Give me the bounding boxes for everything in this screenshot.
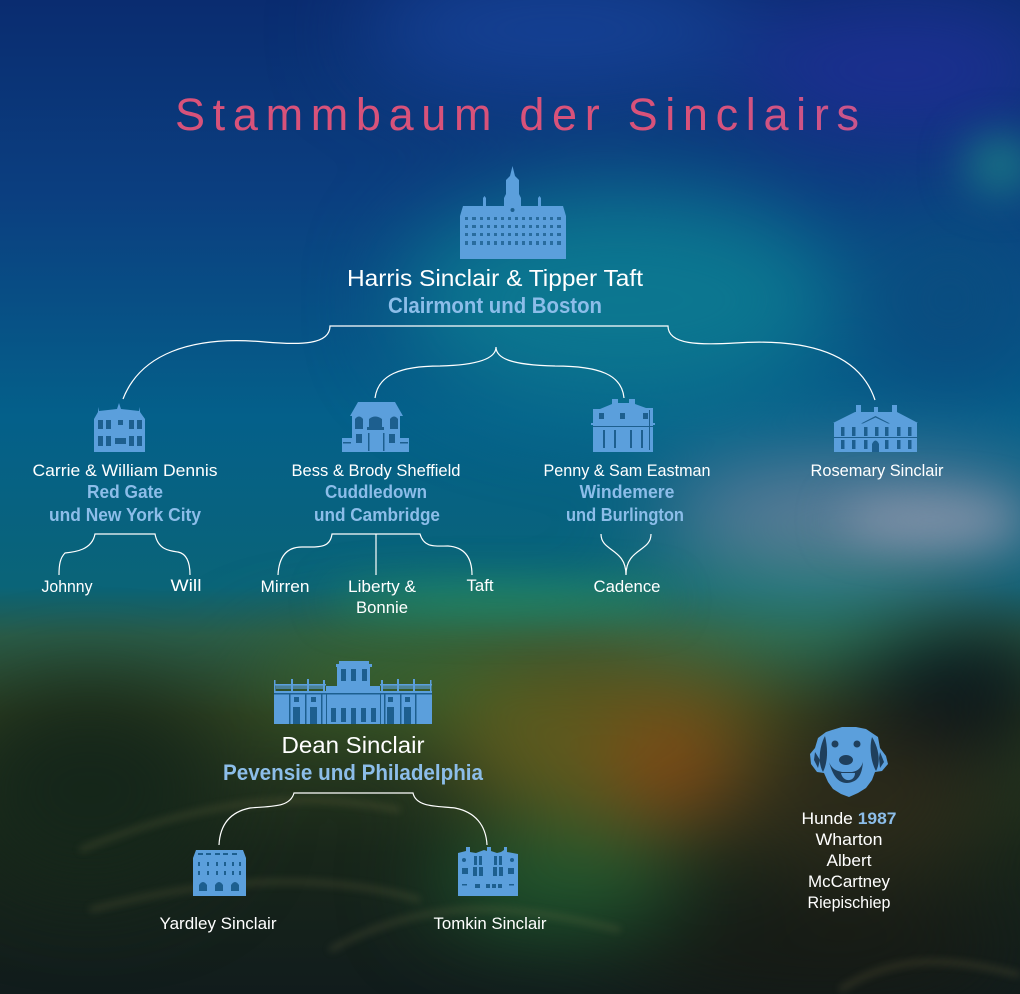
dog names: McCartney — [808, 872, 890, 891]
places: Windemere — [580, 482, 674, 502]
icon: Pevensie building — [274, 661, 432, 724]
child: Liberty and Bonnie: Bonnie — [356, 598, 408, 617]
icon: Rosemary house — [833, 405, 918, 452]
child: Cadence: Cadence — [594, 577, 660, 596]
child: Tomkin Sinclair — [434, 847, 547, 933]
places: Red Gate — [87, 482, 163, 502]
places: Pevensie und Philadelphia — [223, 760, 484, 785]
panel: Carrie and William Dennis: und New York City — [49, 505, 201, 525]
dog names: Wharton — [816, 830, 882, 849]
panel: Penny and Sam Eastman: und Burlington — [566, 505, 684, 525]
child: Taft: Taft — [466, 576, 494, 595]
icon: Yardley house — [193, 850, 246, 896]
connector: first generation — [123, 326, 875, 400]
icon: Windemere house — [591, 399, 655, 452]
connector: children — [219, 793, 487, 845]
panel: Bess and Brody Sheffield: und Cambridge — [314, 505, 440, 525]
panel: Rosemary Sinclair — [810, 405, 944, 480]
child: Yardley Sinclair — [160, 850, 277, 933]
name: Carrie & William Dennis — [32, 461, 218, 480]
dog names — [808, 830, 890, 912]
connector: children — [59, 534, 190, 575]
places: Clairmont und Boston — [388, 293, 602, 318]
connector: children — [278, 534, 472, 575]
child: Mirren: Mirren — [260, 577, 310, 596]
child: Liberty and Bonnie — [348, 577, 417, 617]
child: Liberty and Bonnie: Liberty & — [348, 577, 417, 596]
title: Stammbaum der Sinclairs — [175, 89, 859, 140]
connector: child — [601, 534, 651, 575]
name: Bess & Brody Sheffield — [292, 461, 460, 480]
places: Cuddledown — [325, 482, 427, 502]
name: Harris Sinclair & Tipper Taft — [347, 265, 644, 291]
child: Johnny: Johnny — [42, 577, 93, 596]
name: Penny & Sam Eastman — [544, 461, 710, 480]
dog names: Riepischiep — [808, 893, 890, 912]
icon: Tomkin house — [458, 847, 518, 896]
name: Tomkin Sinclair — [434, 914, 547, 933]
panel: Dean Sinclair — [160, 661, 547, 933]
name: Dean Sinclair — [282, 732, 425, 758]
heading: Hunde 1987 — [802, 809, 896, 828]
icon: dog head — [810, 727, 888, 797]
name: Rosemary Sinclair — [810, 461, 944, 480]
name: Yardley Sinclair — [160, 914, 277, 933]
panel: Carrie and William Dennis — [32, 403, 218, 596]
panel: Harris Sinclair and Tipper Taft — [347, 166, 644, 318]
panel: Penny and Sam Eastman — [544, 399, 710, 596]
icon: Cuddledown house — [342, 402, 409, 452]
panel: dogs — [802, 727, 896, 912]
icon: Clairmont building — [460, 166, 566, 259]
dog names: Albert — [826, 851, 872, 870]
panel: Bess and Brody Sheffield — [260, 402, 494, 617]
icon: Red Gate house — [94, 403, 145, 452]
child: Will: Will — [170, 576, 202, 595]
